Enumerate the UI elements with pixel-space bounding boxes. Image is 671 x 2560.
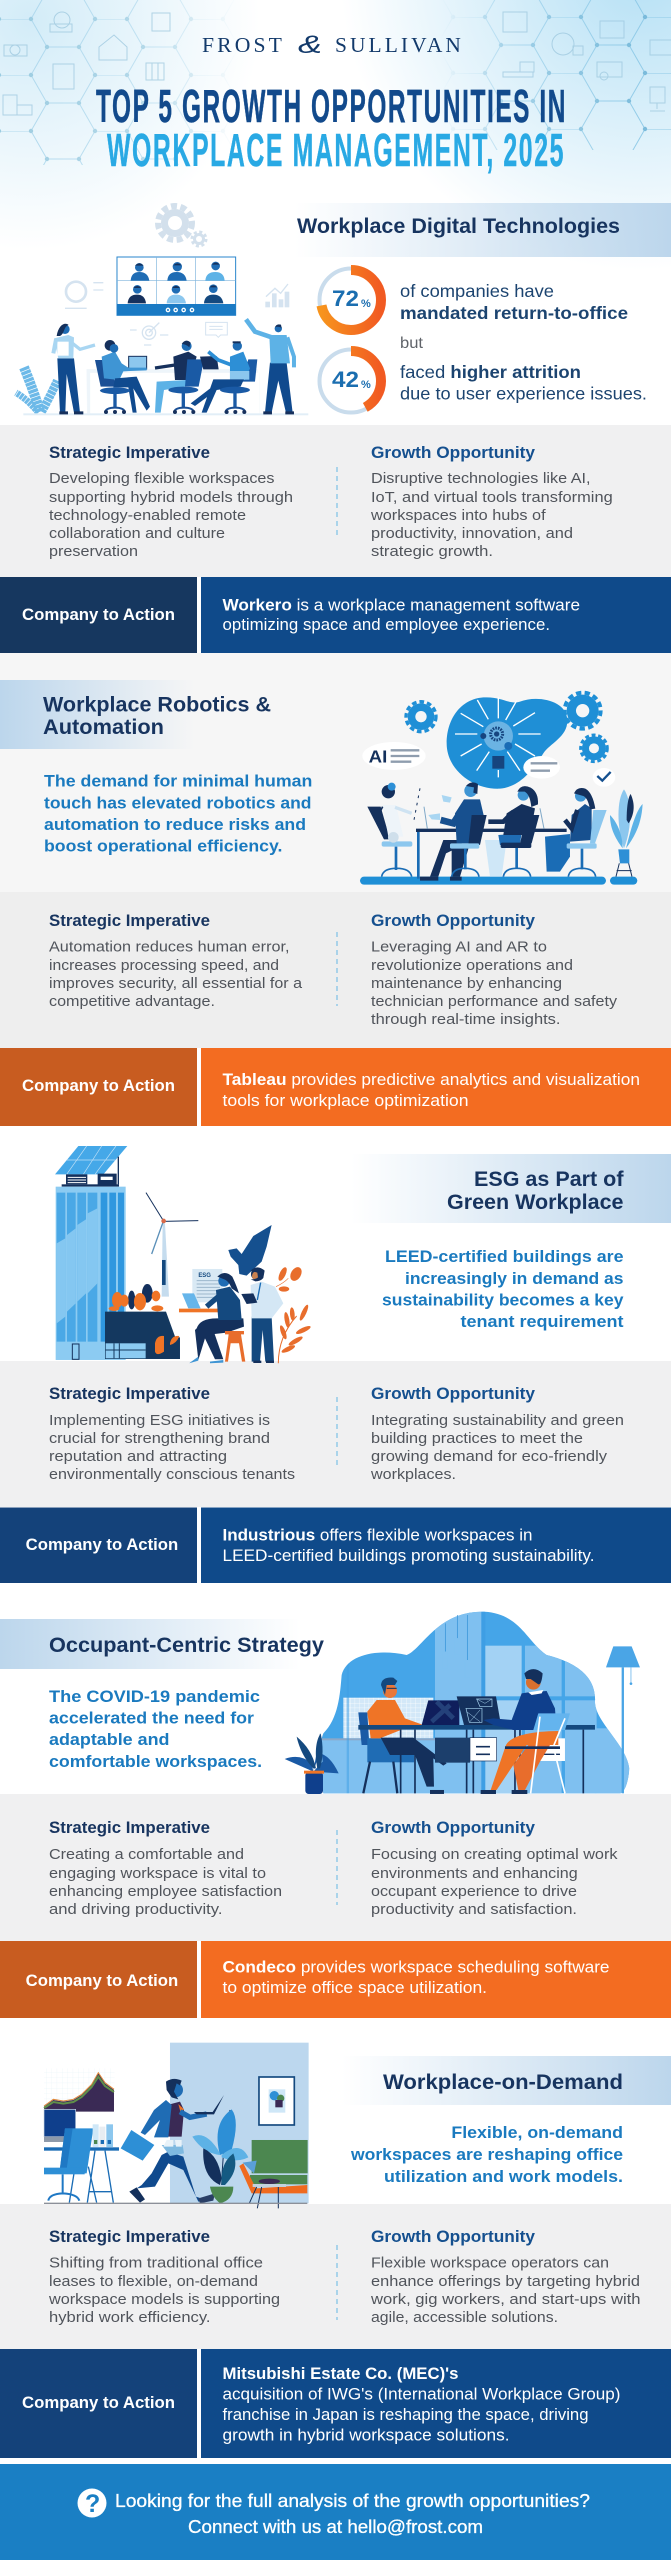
walking man [129,2079,224,2203]
laptops [422,1696,501,1725]
growth opportunity 3: growing demand for eco-friendly [371,1448,608,1465]
AI speech bubble: AI [369,746,387,766]
section 2 heading band: Automation [43,716,164,739]
thought blob with light bulb [447,697,567,789]
section 2 heading band [0,680,271,749]
stat text: higher attrition: faced higher attrition [400,362,581,382]
strategic imperative 3: crucial for strengthening brand [49,1430,270,1447]
section 3 lead text [382,1247,624,1331]
icon: gears [158,206,206,246]
company to action bar 2 [0,1048,671,1126]
strategic imperative 1: Strategic Imperative [49,443,210,462]
growth opportunity 1: Growth Opportunity [371,443,536,462]
growth opportunity 4 [371,1818,618,1918]
stat: 72 percent: % [361,298,371,310]
section 5 lead text: workspaces are reshaping office [350,2145,623,2164]
growth opportunity 5: work, gig workers, and start-ups with [370,2291,640,2308]
company to action bar 4: Company to Action [26,1972,178,1990]
person in navy [481,1669,558,1794]
growth opportunity 1 [370,443,613,560]
strategic imperative 5 [48,2227,280,2326]
footer text [115,2491,590,2537]
footer call to action [0,2464,671,2560]
growth opportunity 2: technician performance and safety [371,993,618,1010]
illustration: AI and robotics meeting [360,693,643,885]
strategic imperative 2: increases processing speed, and [49,957,279,974]
standing man pointing [246,319,294,414]
company to action bar 5: Mitsubishi Estate Co. (MEC)'s [222,2365,458,2383]
strategic imperative 3: reputation and attracting [49,1448,227,1465]
blue leaf shape [228,1225,272,1276]
strategic imperative 4: Strategic Imperative [49,1818,210,1837]
plant in pot [285,1733,339,1794]
ESG report paper [192,1269,222,1302]
white chair [505,1713,570,1793]
panel: section 1 imperative and opportunity [0,425,671,577]
section 3 lead text: sustainability becomes a key [382,1290,624,1310]
section 5 heading band: Workplace-on-Demand [383,2071,623,2094]
wall [170,2043,309,2203]
section 3 lead text: tenant requirement [460,1312,624,1331]
growth opportunity 2: Growth Opportunity [371,911,536,930]
company to action bar 3: LEED-certified buildings promoting sustainability. [222,1547,594,1565]
strategic imperative 4: and driving productivity. [49,1901,222,1918]
stat: 72 percent [320,268,382,332]
company to action bar 3: Industrious offers flexible workspaces in [222,1527,532,1545]
stat text: higher attrition: due to user experience issues. [400,384,647,404]
section 5 lead text: utilization and work models. [384,2167,623,2186]
section 3 heading band [351,1154,671,1223]
company to action bar 5: Company to Action [22,2394,175,2412]
growth opportunity 5: agile, accessible solutions. [371,2309,558,2326]
company to action bar 1 [0,577,671,653]
presenter woman [53,324,95,414]
growth opportunity 2: revolutionize operations and [371,957,573,974]
section 2 lead text: The demand for minimal human [44,772,312,791]
room blob [313,1605,633,1797]
panel: section 3 imperative and opportunity [0,1361,671,1507]
strategic imperative 5: Shifting from traditional office [49,2254,263,2272]
strategic imperative 2: improves security, all essential for a [49,975,303,992]
woman at laptop [189,1273,245,1363]
strategic imperative 3: environmentally conscious tenants [49,1466,295,1483]
stock chart [44,2068,115,2112]
strategic imperative 4: Creating a comfortable and [49,1846,244,1863]
company to action bar 5: acquisition of IWG's (International Workplace Group) [222,2386,620,2404]
section 4 lead text: The COVID-19 pandemic [49,1687,260,1706]
growth opportunity 2: Leveraging AI and AR to [371,938,547,956]
growth opportunity 5: Growth Opportunity [371,2227,536,2246]
panel: section 2 imperative and opportunity [0,892,671,1048]
growth opportunity 2: through real-time insights. [371,1011,560,1028]
section 4 lead text: adaptable and [49,1730,170,1749]
woman in centre [485,786,539,877]
growth opportunity 1: productivity, innovation, and [371,525,573,542]
stat: 42 percent [320,350,382,412]
glass tower [56,1187,126,1360]
left chair and person in orange [358,1678,447,1794]
briefcase [121,2130,154,2161]
growth opportunity 3: workplaces. [370,1466,456,1483]
meeting table [87,369,259,413]
stat text: mandated return to office: mandated return-to-office [400,303,628,323]
footer text: Connect with us at hello@frost.com [188,2517,483,2537]
strategic imperative 3: Implementing ESG initiatives is [49,1412,270,1429]
floor lamp [606,1646,640,1793]
section 1 heading band [295,203,671,257]
panel: section 4 imperative and opportunity [0,1794,671,1941]
sofa and coffee table [239,2140,308,2208]
section 3 lead text: increasingly in demand as [405,1269,624,1288]
stat text: mandated return to office [400,281,628,323]
footer text: Looking for the full analysis of the growth opportunities? [115,2491,590,2511]
faded target icon [130,323,168,345]
man with tablet [241,1267,283,1363]
desk and laptop [179,1293,219,1312]
company to action bar 1: Workero is a workplace management software [222,596,580,614]
growth opportunity 4: environments and enhancing [371,1865,578,1882]
strategic imperative 3 [49,1384,295,1483]
strategic imperative 5: workspace models is supporting [48,2291,280,2308]
growth opportunity 4: Growth Opportunity [371,1818,536,1837]
strategic imperative 1: collaboration and culture [49,525,225,542]
meeting table [416,807,567,879]
strategic imperative 1: Developing flexible workspaces [49,470,274,487]
company to action bar 4 [0,1941,671,2018]
strategic imperative 5: leases to flexible, on-demand [49,2273,258,2290]
strategic imperative 4: enhancing employee satisfaction [49,1883,282,1900]
illustration: worker walking through flexible office [44,2043,309,2208]
wind turbine [146,1193,198,1297]
growth opportunity 1: workspaces into hubs of [370,507,547,524]
strategic imperative 3: Strategic Imperative [49,1384,210,1403]
icon: question mark [78,2488,106,2518]
company to action bar 3 [0,1508,671,1583]
section 3 heading band: ESG as Part of [474,1168,625,1191]
man in suit [420,782,487,881]
growth opportunity 5 [370,2227,640,2326]
growth opportunity 4: productivity and satisfaction. [371,1901,577,1918]
stat: 72 percent: 72 [332,286,359,311]
faded growth chart icon [265,284,289,307]
low building [105,1312,180,1359]
plant [16,367,57,413]
robot [367,783,420,877]
section 3 heading band: Green Workplace [447,1191,624,1214]
section 5 heading band [342,2056,671,2105]
strategic imperative 1: supporting hybrid models through [49,489,293,506]
section 4 lead text: comfortable workspaces. [49,1752,262,1771]
section 2 background [0,653,671,892]
growth opportunity 1: IoT, and virtual tools transforming [371,489,613,506]
strategic imperative 5: hybrid work efficiency. [49,2309,211,2326]
potted plant [610,789,643,877]
growth opportunity 4: occupant experience to drive [371,1883,577,1900]
strategic imperative 1 [49,443,293,560]
illustration: hybrid video meeting [16,257,308,415]
seated person middle [155,341,204,414]
stat text: higher attrition [400,362,647,404]
growth opportunity 2 [371,911,618,1028]
growth opportunity 3: building practices to meet the [371,1430,583,1447]
illustration: occupants working at shared desk [285,1605,640,1797]
plant in green pot [192,2109,248,2203]
growth opportunity 3 [370,1384,624,1483]
ground [23,413,308,415]
floor line [44,2203,307,2204]
section 2 lead text: touch has elevated robotics and [44,793,312,812]
faded speech bubble [206,322,227,337]
ESG report paper: ESG [198,1273,211,1279]
logo: Frost & Sullivan: FROST [202,33,285,57]
strategic imperative 2: Automation reduces human error, [49,938,290,956]
panel: section 5 imperative and opportunity [0,2204,671,2349]
section 5 lead text: Flexible, on-demand [451,2123,623,2142]
laptop [129,356,147,369]
woman on right [545,788,607,877]
company to action bar 1: Company to Action [22,606,175,624]
logo: Frost & Sullivan: & [298,31,322,59]
growth opportunity 2: maintenance by enhancing [371,975,562,992]
faded gauge icon [65,282,103,308]
desk, monitor and chair [44,2109,119,2203]
company to action bar 5: growth in hybrid workspace solutions. [222,2426,510,2444]
strategic imperative 4: engaging workspace is vital to [49,1865,266,1882]
company to action bar 3: Company to Action [26,1536,178,1554]
desk [358,1725,595,1793]
strategic imperative 1: preservation [49,543,138,560]
logo: Frost & Sullivan: SULLIVAN [335,33,464,57]
section 4 lead text [49,1687,262,1771]
section 1 heading band: Workplace Digital Technologies [297,215,620,238]
framed art [259,2077,294,2125]
check mark [593,768,615,787]
section 4 lead text: accelerated the need for [49,1708,254,1728]
growth opportunity 5: enhance offerings by targeting hybrid [371,2273,640,2290]
stat: 42 percent: % [361,379,371,391]
growth opportunity 5: Flexible workspace operators can [371,2254,609,2272]
growth opportunity 3: Integrating sustainability and green [371,1412,624,1429]
header background with hexagon pattern [0,0,671,208]
AI speech bubble [362,742,426,770]
company to action bar 5 [0,2349,671,2458]
growth opportunity 1: strategic growth. [371,543,493,560]
strategic imperative 2: Strategic Imperative [49,911,210,930]
company to action bar 5: franchise in Japan is reshaping the space, driving [222,2406,588,2424]
illustration: green building and ESG report [55,1146,312,1363]
strategic imperative 2 [49,911,303,1010]
section 2 heading band: Workplace Robotics & [43,694,271,716]
stat text: mandated return to office: of companies have [400,281,554,301]
logo: Frost & Sullivan [202,31,464,59]
company to action bar 2: Company to Action [22,1077,175,1095]
seated person left [95,340,150,414]
title [96,80,567,176]
growth opportunity 4: Focusing on creating optimal work [371,1846,618,1863]
section 4 heading band [0,1619,324,1669]
company to action bar 2: tools for workplace optimization [222,1092,468,1110]
solar panel and roof [55,1146,127,1187]
company to action bar 1: optimizing space and employee experience. [222,616,550,634]
orange foliage [276,1265,312,1363]
ground platform [360,877,637,885]
but connector: but [400,335,424,352]
icon: question mark: ? [85,2490,100,2518]
strategic imperative 1: technology-enabled remote [49,507,246,524]
section 2 lead text: boost operational efficiency. [44,837,282,856]
company to action bar 4: to optimize office space utilization. [222,1979,487,1997]
gears [406,693,607,762]
trees [109,1284,163,1311]
growth opportunity 1: Disruptive technologies like AI, [371,470,590,487]
stat: 42 percent: 42 [332,367,359,392]
section 2 lead text: automation to reduce risks and [44,815,306,834]
strategic imperative 5: Strategic Imperative [49,2227,210,2246]
growth opportunity 3: Growth Opportunity [371,1384,536,1403]
company to action bar 2: Tableau provides predictive analytics and visualization [222,1071,640,1089]
small speech bubble [523,756,560,779]
company to action bar 4: Condeco provides workspace scheduling software [222,1959,610,1977]
dark laptop [200,356,219,369]
section 4 heading band: Occupant-Centric Strategy [49,1634,324,1657]
section 2 lead text [44,772,312,856]
section 5 lead text [350,2123,623,2186]
section 3 lead text: LEED-certified buildings are [385,1247,624,1266]
seated person right [191,341,257,414]
pendant lamps [443,1615,470,1678]
strategic imperative 2: competitive advantage. [49,993,215,1010]
strategic imperative 4 [49,1818,282,1918]
video conference screen [117,257,236,315]
